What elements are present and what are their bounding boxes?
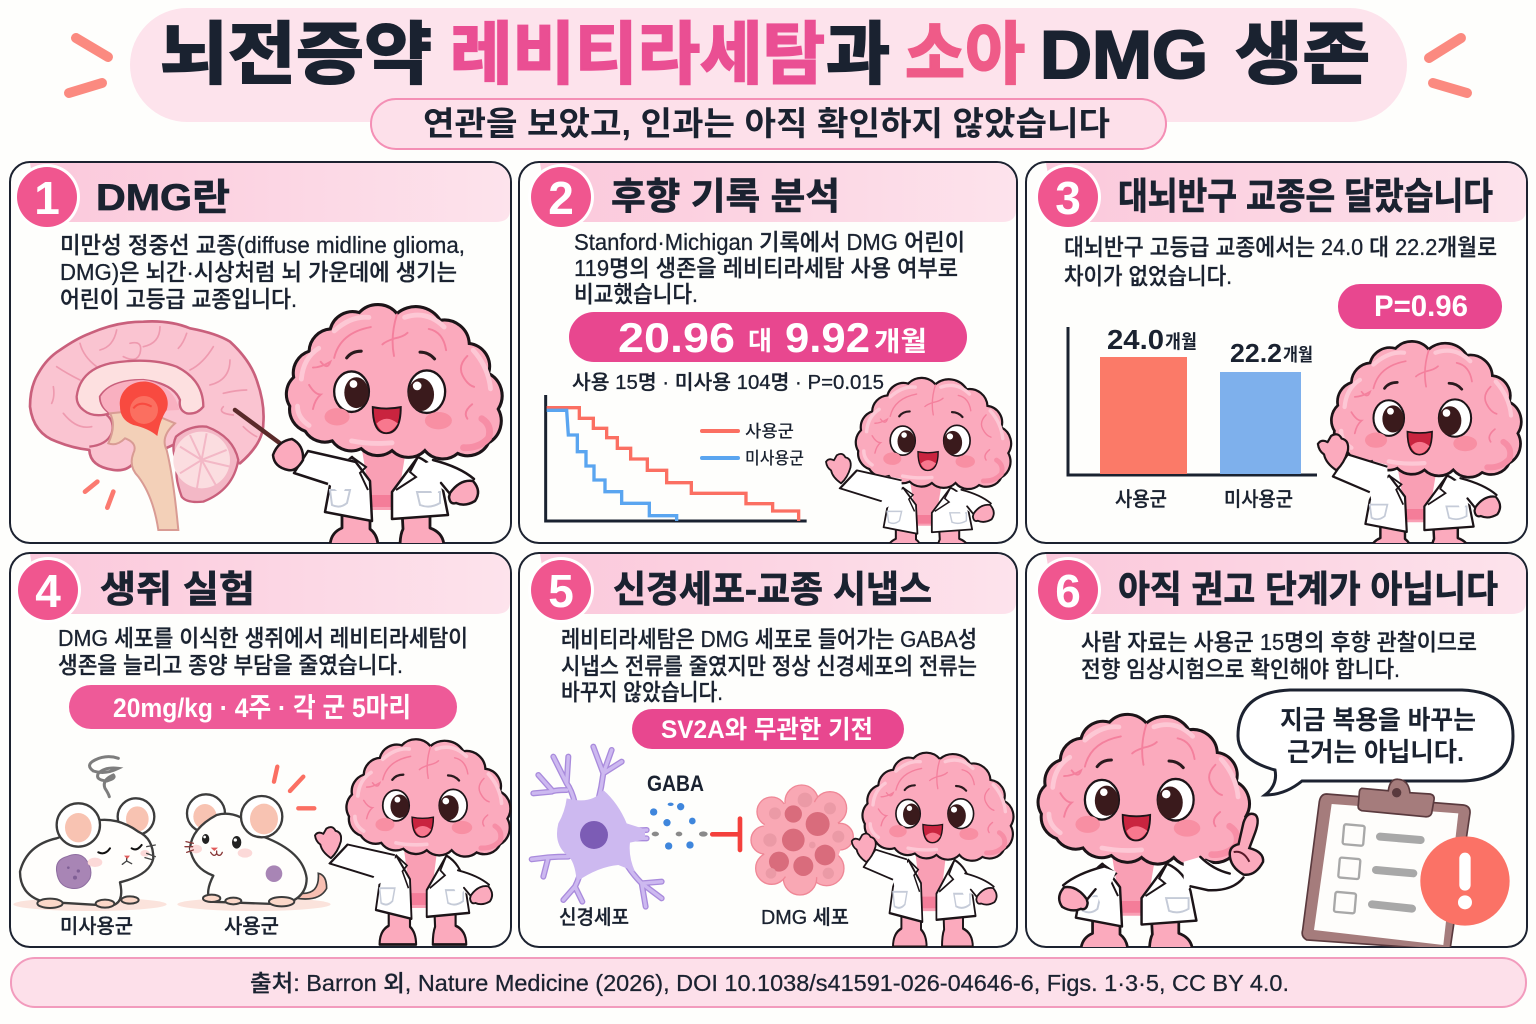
- bar chart: [1068, 324, 1317, 511]
- number badge 1: 1: [34, 172, 60, 224]
- title: DMG: [1040, 17, 1208, 93]
- mascot waving 4: [315, 739, 510, 944]
- mascot pointing: [273, 305, 502, 547]
- key result pill: 9.92: [785, 314, 870, 361]
- mechanism pill: [632, 709, 904, 749]
- dose pill: [69, 685, 457, 729]
- chart legend: 미사용군: [745, 449, 804, 468]
- body text 2: 비교했습니다.: [574, 281, 698, 307]
- title: 생존: [1235, 17, 1370, 93]
- mouse untreated: [13, 757, 167, 911]
- body text 1: 어린이 고등급 교종입니다.: [60, 286, 297, 312]
- subtitle pill: [371, 99, 1166, 149]
- chart legend: 사용군: [745, 422, 794, 441]
- mechanism pill: SV2A와 무관한 기전: [661, 716, 873, 744]
- body text 5: 시냅스 전류를 줄였지만 정상 신경세포의 전류는: [561, 653, 977, 679]
- body text 5: [561, 626, 977, 705]
- neuron and tumor labels: DMG 세포: [761, 906, 849, 929]
- body text 2: Stanford·Michigan 기록에서 DMG 어린이: [574, 229, 965, 255]
- body text 6: 사람 자료는 사용군 15명의 후향 관찰이므로: [1081, 629, 1477, 655]
- alert badge: [1420, 836, 1510, 926]
- speech bubble: 근거는 아닙니다.: [1287, 737, 1464, 767]
- key result pill: 대: [748, 326, 772, 356]
- heading 1: DMG란: [96, 177, 230, 218]
- number badge 3: [1035, 164, 1101, 230]
- body text 2: [574, 229, 965, 307]
- key result pill: 개월: [874, 327, 927, 357]
- bar chart: 사용군: [1115, 488, 1167, 511]
- brain cross-section diagram: [30, 321, 264, 530]
- bar chart: 22.2: [1230, 338, 1282, 368]
- subtitle pill: 연관을 보았고, 인과는 아직 확인하지 않았습니다: [423, 105, 1110, 142]
- body text 6: [1081, 629, 1477, 682]
- number badge 6: 6: [1055, 565, 1081, 617]
- key result pill: [569, 312, 967, 362]
- body text 3: 대뇌반구 고등급 교종에서는 24.0 대 22.2개월로: [1064, 234, 1497, 260]
- mouse labels: 미사용군: [60, 915, 133, 938]
- neuron and tumor labels: [559, 906, 849, 929]
- decorative sparks left: [69, 38, 108, 93]
- source footer: [11, 958, 1526, 1007]
- panel 6: 아직 권고 단계가 아닙니다: [1026, 553, 1527, 952]
- body text 1: DMG)은 뇌간·시상처럼 뇌 가운데에 생기는: [60, 259, 457, 285]
- GABA label: GABA: [647, 771, 704, 796]
- mouse treated: [177, 767, 331, 911]
- mouse labels: [60, 915, 279, 938]
- bar chart: 개월: [1283, 345, 1313, 365]
- speech bubble: 지금 복용을 바꾸는: [1280, 705, 1476, 735]
- body text 1: [60, 232, 465, 312]
- heading 5: 신경세포-교종 시냅스: [613, 569, 932, 610]
- DMG tumor cell cluster: [751, 785, 853, 895]
- pointer stick: [235, 410, 285, 447]
- bar chart: 미사용군: [1224, 488, 1293, 511]
- GABA vesicles and inhibition mark: [650, 803, 740, 850]
- heading 2: 후향 기록 분석: [611, 176, 840, 217]
- p value pill: [1338, 284, 1502, 329]
- body text 5: 레비티라세탐은 DMG 세포로 들어가는 GABA성: [561, 626, 977, 652]
- source footer: 출처: Barron 외, Nature Medicine (2026), DOI 10.1038/s41591-026-04646-6, Figs. 1·3·5, CC BY 4.0.: [250, 970, 1289, 996]
- speech bubble: [1238, 690, 1513, 795]
- title banner: [130, 8, 1407, 122]
- bar chart: 개월: [1165, 331, 1197, 353]
- body text 4: DMG 세포를 이식한 생쥐에서 레비티라세탐이: [58, 625, 468, 651]
- panel 3: 대뇌반구 교종: [1026, 162, 1527, 555]
- panel 1: DMG란: [10, 162, 511, 547]
- mouse labels: 사용군: [224, 915, 279, 938]
- body text 3: [1064, 234, 1497, 289]
- bar chart: 24.0: [1107, 324, 1164, 355]
- number badge 1: [14, 164, 80, 230]
- title: 과: [826, 17, 890, 93]
- number badge 5: 5: [548, 565, 574, 617]
- dose pill: 20mg/kg · 4주 · 각 군 5마리: [113, 693, 411, 723]
- number badge 6: [1035, 557, 1101, 623]
- heading 3: 대뇌반구 교종은 달랐습니다: [1118, 176, 1493, 217]
- title: 소아: [905, 17, 1025, 93]
- body text 4: [58, 625, 468, 678]
- heading 4: 생쥐 실험: [100, 569, 255, 610]
- body text 3: 차이가 없었습니다.: [1064, 263, 1232, 289]
- number badge 2: [528, 164, 594, 230]
- number badge 2: 2: [548, 172, 574, 224]
- mascot waving 3: [1318, 341, 1521, 555]
- heading 6: 아직 권고 단계가 아닙니다: [1118, 569, 1498, 610]
- survival curve chart: [546, 395, 807, 521]
- number badge 5: [528, 557, 594, 623]
- body text 1: 미만성 정중선 교종(diffuse midline glioma,: [60, 232, 465, 258]
- number badge 4: 4: [35, 565, 61, 617]
- panel 2: 후향 기록 분석: [519, 162, 1017, 552]
- panel 5: 신경세포-교종 시냅스: [519, 553, 1017, 947]
- decorative sparks right: [1429, 38, 1467, 93]
- body text 5: 바꾸지 않았습니다.: [561, 679, 723, 705]
- title: 뇌전증약: [160, 17, 432, 93]
- chart legend: [702, 422, 804, 468]
- panel 4: 생쥐 실험: [10, 553, 511, 947]
- number badge 4: [15, 557, 81, 623]
- body text 4: 생존을 늘리고 종양 부담을 줄였습니다.: [58, 652, 403, 678]
- title: [160, 17, 1370, 93]
- neuron and tumor labels: 신경세포: [559, 906, 629, 929]
- body text 2: 119명의 생존을 레비티라세탐 사용 여부로: [574, 255, 958, 281]
- body text 6: 전향 임상시험으로 확인해야 합니다.: [1081, 656, 1400, 682]
- clipboard icon: [1302, 779, 1470, 950]
- mascot waving 2: [826, 378, 1011, 552]
- number badge 3: 3: [1055, 172, 1081, 224]
- key result pill: 20.96: [618, 314, 735, 361]
- p value pill: P=0.96: [1374, 290, 1468, 323]
- sample size line: 사용 15명 · 미사용 104명 · P=0.015: [572, 371, 884, 394]
- neuron: [532, 747, 662, 907]
- mascot with raised finger: [1038, 714, 1263, 952]
- title: 레비티라세탐: [450, 17, 825, 93]
- mascot waving 5: [852, 753, 1013, 947]
